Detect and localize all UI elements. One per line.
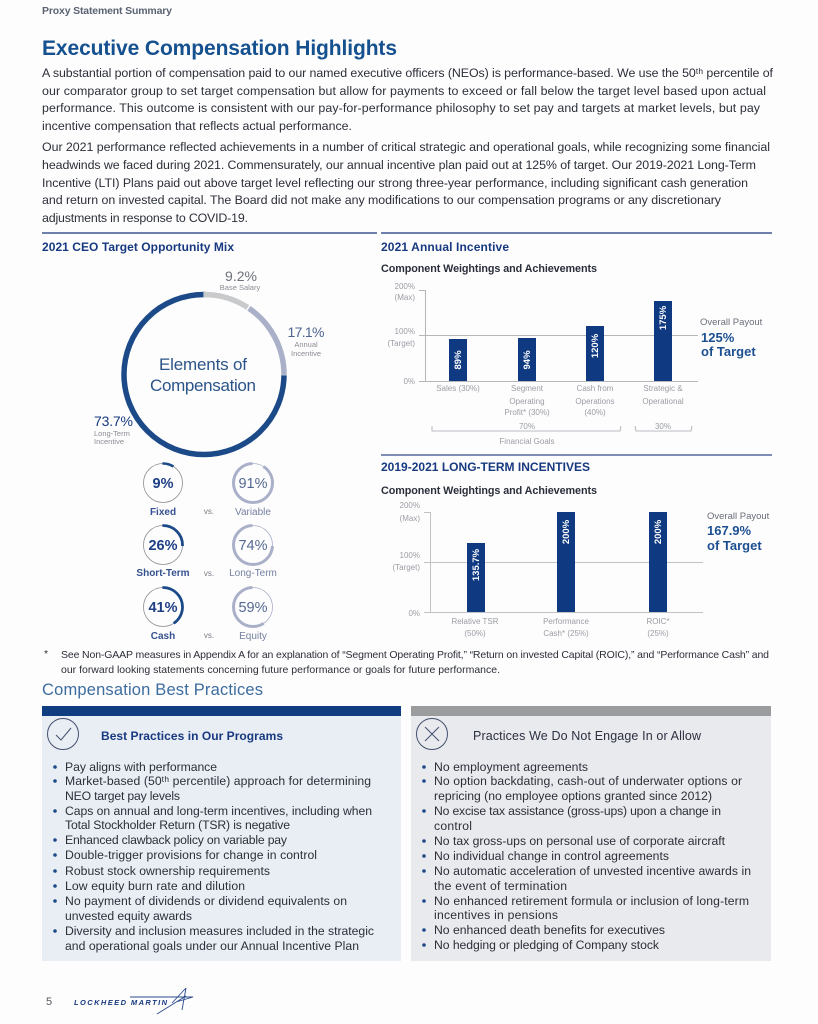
list: best practices	[53, 760, 374, 953]
list: best practices: Diversity and inclusion measures included in the strategic	[65, 924, 374, 938]
list: best practices: Pay aligns with performance	[65, 760, 217, 774]
list: best practices: Robust stock ownership requirements	[65, 864, 270, 878]
bar chart: annual incentive: 89%	[453, 350, 464, 370]
list: prohibited practices: No individual change in control agreements	[434, 849, 669, 863]
icon: cross	[416, 718, 448, 750]
bar chart: long-term incentives: Relative TSR	[452, 617, 499, 626]
heading: annual incentive: 2021 Annual Incentive	[381, 240, 509, 254]
bar chart: annual incentive: Operations	[575, 397, 615, 406]
icon: check mark	[48, 718, 78, 750]
bar chart: long-term incentives: Performance	[543, 617, 589, 626]
list: best practices: and operational goals under our Annual Incentive Plan	[65, 939, 359, 953]
bar chart: annual incentive: Strategic &	[643, 384, 683, 393]
vs label: vs.	[204, 631, 214, 640]
list: prohibited practices: No enhanced retirement formula or inclusion of long-term	[434, 894, 749, 908]
donut label: annual incentive	[288, 324, 324, 358]
bar chart: annual incentive: 94%	[522, 350, 533, 370]
bar chart: annual incentive: 0%	[403, 377, 415, 386]
panel: long-term incentives	[381, 454, 772, 638]
footnote	[44, 648, 769, 676]
ring: cash 41%: 41%	[148, 600, 178, 616]
donut label: long-term incentive: Incentive	[94, 437, 124, 446]
list: prohibited practices	[422, 760, 751, 952]
vs label: vs.	[204, 507, 214, 516]
donut centre label: Compensation	[150, 376, 256, 395]
bar chart: long-term incentives: 0%	[408, 609, 420, 618]
list: prohibited practices: No enhanced death benefits for executives	[434, 923, 665, 937]
list: best practices: Enhanced clawback policy on variable pay	[65, 833, 288, 847]
subheading: long-term weightings: Component Weightings and Achievements	[381, 485, 597, 497]
donut chart	[124, 294, 284, 454]
list: prohibited practices: No employment agreements	[434, 760, 588, 774]
bar chart: annual incentive: 200%	[395, 282, 415, 291]
donut label: base salary: 9.2%	[225, 268, 257, 284]
footnote: *	[44, 648, 48, 660]
list: best practices: Low equity burn rate and dilution	[65, 879, 245, 893]
callout: overall payout 167.9%: Overall Payout	[707, 511, 770, 522]
list: prohibited practices: No option backdating, cash-out of underwater options or	[434, 774, 742, 788]
bar chart: annual incentive: Operational	[642, 397, 684, 406]
intro text block: adjustments in response to COVID-19.	[42, 211, 248, 225]
ring: variable 91%: 91%	[238, 476, 268, 492]
ring: variable 91%	[234, 464, 272, 518]
list: prohibited practices: No automatic acceleration of unvested incentive awards in	[434, 864, 751, 878]
bar chart: annual incentive: (Max)	[395, 293, 415, 302]
bar chart: annual incentive: Operating	[509, 397, 545, 406]
list: best practices: unvested equity awards	[65, 909, 192, 923]
ring: fixed 9%: Fixed	[150, 507, 176, 518]
list: best practices: Total Stockholder Return (TSR) is negative	[65, 818, 290, 832]
list: best practices: NEO target pay levels	[65, 789, 180, 803]
list: best practices: Market-based (50ᵗʰ percentile) approach for determining	[65, 774, 371, 788]
panel: practices we do not engage in	[411, 706, 771, 961]
donut centre label	[150, 355, 256, 395]
bar chart: annual incentive	[387, 282, 698, 446]
callout: overall payout 125%	[700, 317, 763, 359]
list: prohibited practices: control	[434, 819, 472, 833]
heading: compensation best practices: Compensation Best Practices	[42, 681, 263, 699]
logo: Lockheed Martin	[74, 988, 193, 1014]
bar chart: annual incentive: Sales (30%)	[436, 384, 480, 393]
ring: equity 59%: 59%	[238, 600, 268, 616]
donut label: long-term incentive: 73.7%	[94, 413, 133, 429]
bar chart: annual incentive: (Target)	[387, 339, 415, 348]
bar chart: annual incentive: 30%	[655, 422, 671, 431]
donut label: long-term incentive: Long-Term	[94, 429, 130, 438]
intro text block: incentive compensation that reflects actual performance.	[42, 119, 352, 133]
intro text block: Our 2021 performance reflected achievements in a number of critical strategic and operational goals, while recognizing some financial	[42, 140, 770, 154]
callout: overall payout 125%: 125%	[701, 330, 735, 345]
list: best practices: No payment of dividends or dividend equivalents on	[65, 894, 347, 908]
intro text block: our comparator group to set target compensation but allow for payments to exceed or fall below the target level based upon actual	[42, 84, 766, 98]
donut label: base salary: Base Salary	[220, 283, 260, 292]
vs label: vs.	[204, 569, 214, 578]
ring: long-term 74%	[229, 526, 277, 579]
ring: cash 41%: Cash	[151, 631, 175, 642]
heading: CEO mix: 2021 CEO Target Opportunity Mix	[42, 240, 234, 254]
callout: overall payout 167.9%	[707, 511, 770, 553]
bar chart: long-term incentives	[392, 501, 703, 638]
bar chart: long-term incentives: 200%	[561, 519, 572, 544]
bar chart: long-term incentives: 200%	[653, 519, 664, 544]
callout: overall payout 125%: Overall Payout	[700, 317, 763, 328]
list: prohibited practices: the event of termination	[434, 879, 567, 893]
bar chart: long-term incentives: ROIC*	[646, 617, 670, 626]
bar chart: annual incentive: 70%	[519, 422, 535, 431]
ring: long-term 74%: 74%	[238, 538, 268, 554]
donut label: annual incentive: 17.1%	[288, 324, 324, 340]
bar chart: long-term incentives: (Target)	[392, 563, 420, 572]
ring: variable 91%: Variable	[235, 507, 271, 518]
ring: long-term 74%: Long-Term	[229, 568, 277, 579]
ring: cash 41%	[144, 588, 182, 642]
footnote: our forward looking statements concerning future performance or goals for future performance.	[61, 664, 500, 676]
bar chart: annual incentive: Segment	[511, 384, 544, 393]
bar chart: long-term incentives: (Max)	[400, 514, 420, 523]
bar chart: annual incentive: Cash from	[577, 384, 614, 393]
list: prohibited practices: incentives in pensions	[434, 908, 558, 922]
subheading: annual weightings: Component Weightings and Achievements	[381, 263, 597, 275]
heading: long-term incentives: 2019-2021 LONG-TERM INCENTIVES	[381, 460, 590, 474]
page number: 5	[46, 996, 52, 1008]
ring: short-term 26%	[136, 526, 190, 579]
ring: fixed 9%: 9%	[153, 476, 174, 492]
list: prohibited practices: No excise tax assistance (gross-ups) upon a change in	[434, 804, 721, 818]
intro text block: A substantial portion of compensation paid to our named executive officers (NEOs) is performance-based. We use the 50ᵗʰ percentile of	[42, 66, 774, 80]
ring: short-term 26%: 26%	[148, 538, 178, 554]
intro text block: and return on invested capital. The Board did not make any modifications to our compensation programs or any discretionary	[42, 193, 722, 207]
bar chart: long-term incentives: 100%	[400, 551, 420, 560]
ring: fixed 9%	[144, 464, 182, 518]
intro text block	[42, 66, 774, 225]
list: prohibited practices: repricing (no employee options granted since 2012)	[434, 789, 712, 803]
donut centre label: Elements of	[159, 355, 247, 374]
logo: Lockheed Martin: LOCKHEED MARTIN	[74, 998, 168, 1007]
heading: best practices: Best Practices in Our Programs	[101, 729, 283, 743]
bar chart: annual incentive: 175%	[658, 305, 669, 330]
donut label: annual incentive: Annual	[294, 340, 318, 349]
bar chart: long-term incentives: Cash* (25%)	[543, 629, 589, 638]
bar chart: long-term incentives: 135.7%	[471, 548, 482, 581]
callout: overall payout 167.9%: of Target	[707, 538, 762, 553]
title: Executive Compensation Highlights	[42, 37, 397, 60]
list: best practices: Double-trigger provisions for change in control	[65, 848, 317, 862]
bar chart: long-term incentives: 200%	[400, 501, 420, 510]
footnote: See Non-GAAP measures in Appendix A for an explanation of “Segment Operating Profit,” “Return on invested Capital (ROIC),” and “Performance Cash” and	[61, 649, 769, 661]
intro text block: performance. This outcome is consistent with our pay-for-performance philosophy to set pay and targets at market levels, but pay	[42, 101, 761, 115]
bar chart: long-term incentives: (25%)	[647, 629, 669, 638]
ring: equity 59%	[234, 588, 272, 642]
bar chart: annual incentive: 120%	[590, 333, 601, 358]
ring: short-term 26%: Short-Term	[136, 568, 190, 579]
intro text block: headwinds we faced during 2021. Commensurately, our annual incentive plan paid out at 125% of target. Our 2019-2021 Long-Term	[42, 158, 756, 172]
running header: Proxy Statement Summary	[42, 5, 172, 17]
list: prohibited practices: No hedging or pledging of Company stock	[434, 938, 660, 952]
bar chart: annual incentive: (40%)	[584, 408, 606, 417]
donut label: base salary	[220, 268, 260, 292]
panel: best practices in our programs	[42, 706, 401, 961]
donut label: long-term incentive	[94, 413, 133, 446]
bar chart: annual incentive: 100%	[395, 327, 415, 336]
panel: CEO target opportunity mix	[42, 232, 377, 642]
list: best practices: Caps on annual and long-term incentives, including when	[65, 804, 372, 818]
ring: equity 59%: Equity	[239, 631, 267, 642]
bar chart: annual incentive: Financial Goals	[499, 437, 555, 446]
bar chart: long-term incentives: (50%)	[464, 629, 486, 638]
bar chart: annual incentive: Profit* (30%)	[504, 408, 550, 417]
callout: overall payout 125%: of Target	[701, 344, 756, 359]
callout: overall payout 167.9%: 167.9%	[707, 523, 752, 538]
list: prohibited practices: No tax gross-ups on personal use of corporate aircraft	[434, 834, 726, 848]
heading: practices not engaged: Practices We Do Not Engage In or Allow	[473, 729, 702, 743]
donut label: annual incentive: Incentive	[291, 349, 321, 358]
panel: annual incentive	[381, 232, 772, 446]
intro text block: Incentive (LTI) Plans paid out above target level reflecting our strong three-year performance, including significant cash generation	[42, 176, 748, 190]
